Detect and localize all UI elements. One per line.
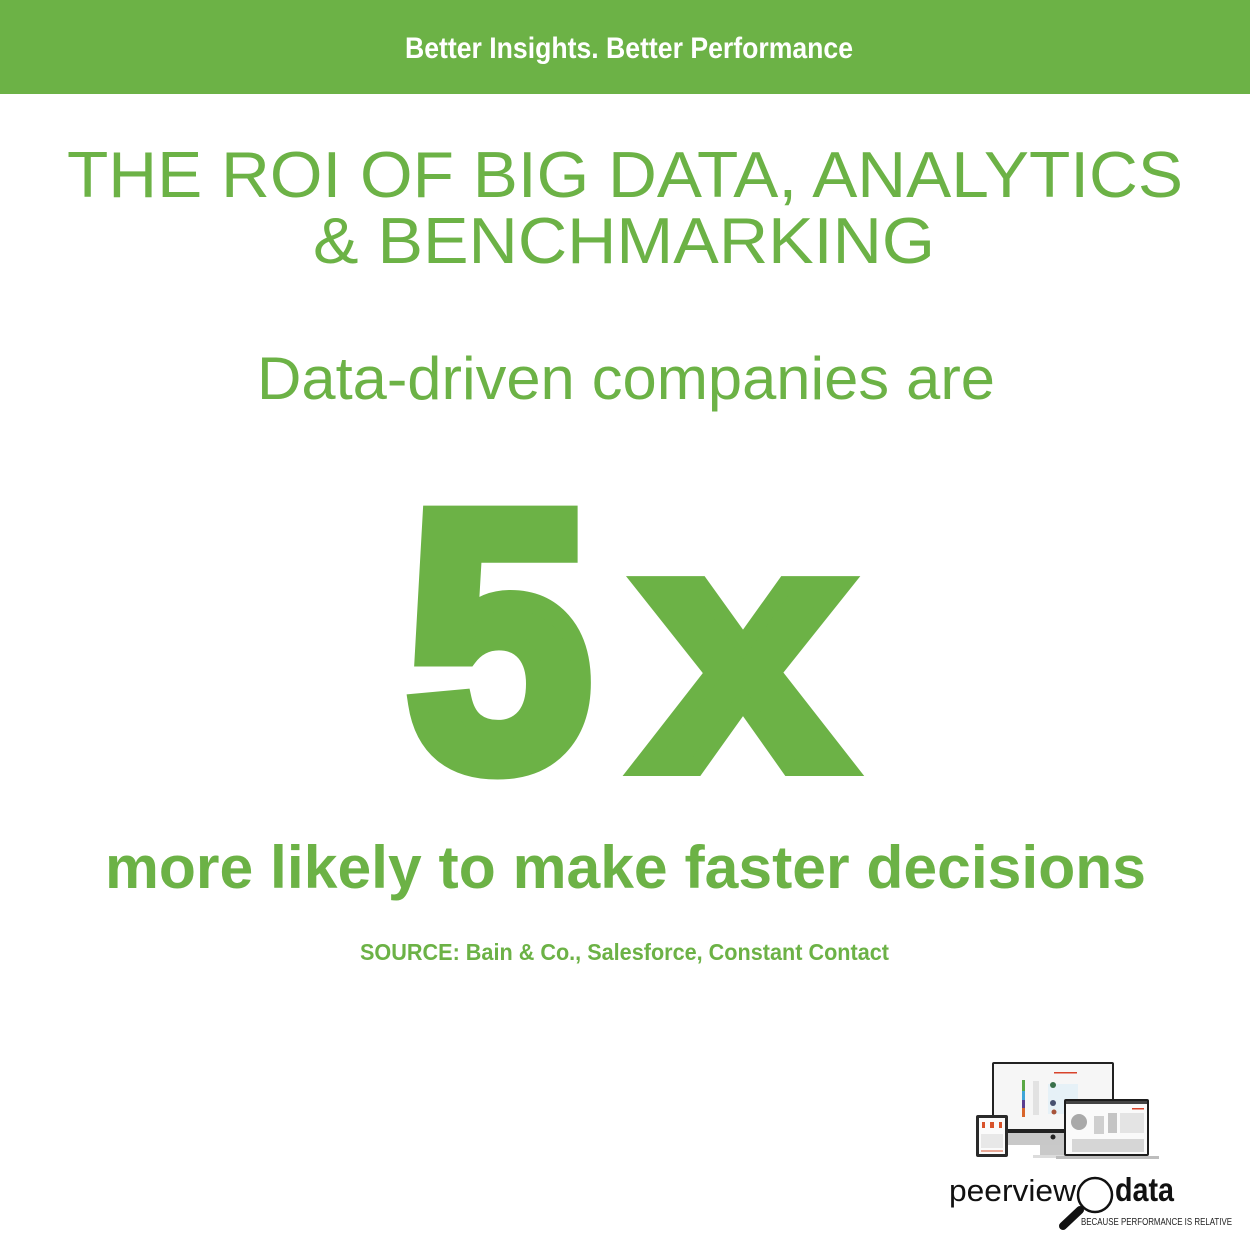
icon: laptop bbox=[1056, 1099, 1159, 1159]
big statistic 5x: x bbox=[637, 453, 852, 842]
title: & BENCHMARKING bbox=[313, 204, 935, 277]
source line: SOURCE: Bain & Co., Salesforce, Constant Contact bbox=[360, 939, 889, 965]
logo wordmark: peerview: peerview bbox=[949, 1173, 1077, 1208]
device mockups bbox=[976, 1062, 1159, 1159]
subheading: Data-driven companies are bbox=[257, 345, 995, 412]
supporting statement: more likely to make faster decisions bbox=[105, 834, 1146, 901]
big statistic 5x: 5 bbox=[407, 437, 591, 844]
title bbox=[67, 138, 1183, 277]
title: THE ROI OF BIG DATA, ANALYTICS bbox=[67, 138, 1183, 211]
icon: desktop monitor bbox=[992, 1062, 1114, 1158]
top banner bbox=[0, 0, 1250, 94]
logo wordmark: data: data bbox=[1115, 1171, 1175, 1208]
big statistic 5x bbox=[407, 437, 852, 844]
banner tagline: Better Insights. Better Performance bbox=[405, 32, 853, 65]
peerview data logo bbox=[949, 1062, 1232, 1228]
icon: tablet bbox=[976, 1115, 1008, 1157]
icon: magnifying glass bbox=[1063, 1178, 1112, 1226]
